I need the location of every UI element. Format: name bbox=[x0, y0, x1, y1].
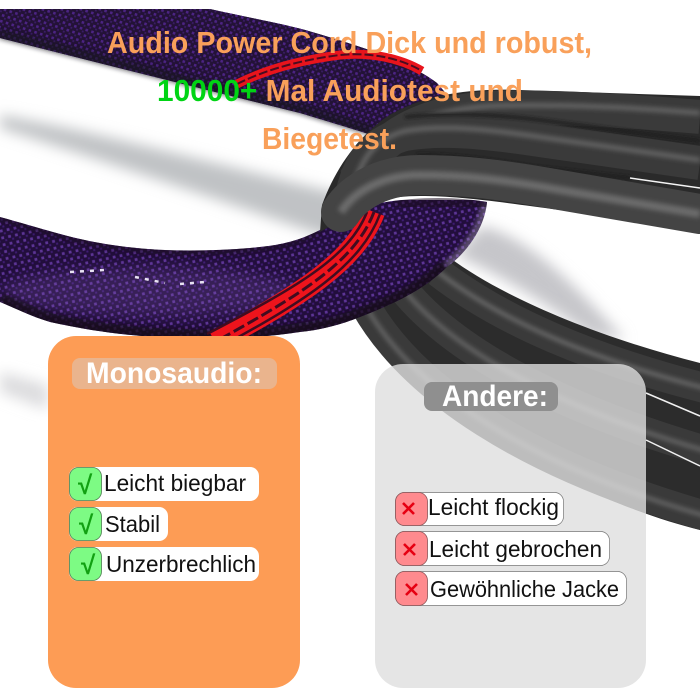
cable bundle backing bbox=[320, 90, 700, 232]
lower braided purple cable bbox=[0, 199, 500, 346]
red stripe on upper cable bbox=[237, 54, 422, 84]
title line two: 10000+ Mal Audiotest und bbox=[157, 73, 523, 108]
panel heading: Andere: Andere: bbox=[442, 380, 548, 413]
strand two bbox=[352, 128, 700, 195]
cast shadows bbox=[0, 115, 625, 410]
lower black cable strands bbox=[360, 258, 700, 530]
orange card bbox=[48, 336, 300, 688]
title line three: Biegetest. bbox=[262, 121, 397, 156]
item: Unzerbrechlich bbox=[69, 547, 259, 581]
item: Stabil: Stabil bbox=[105, 511, 160, 537]
item: Unzerbrechlich: √ bbox=[81, 550, 96, 580]
panel: Andere bbox=[375, 364, 646, 688]
title line one: Audio Power Cord Dick und robust, bbox=[107, 25, 592, 60]
title bbox=[107, 25, 592, 156]
item: Unzerbrechlich: Unzerbrechlich bbox=[106, 551, 256, 577]
item: Stabil: √ bbox=[79, 510, 94, 540]
item: Leicht flockig bbox=[396, 492, 564, 526]
red stripe on lower cable bbox=[207, 212, 380, 346]
item: Stabil bbox=[69, 507, 168, 541]
groove between strands two and three bbox=[417, 155, 630, 178]
item: Leicht gebrochen: Leicht gebrochen bbox=[429, 536, 602, 562]
strands backing bbox=[360, 258, 700, 530]
panel heading: Monosaudio: Monosaudio: bbox=[86, 357, 262, 390]
strand three bbox=[341, 175, 700, 214]
item: Gewöhnliche Jacke: Gewöhnliche Jacke bbox=[430, 576, 619, 602]
groove between strands one and two bbox=[405, 114, 700, 141]
strand one bbox=[355, 105, 700, 180]
item: Leicht flockig: Leicht flockig bbox=[428, 494, 559, 520]
item: Gewöhnliche Jacke bbox=[396, 572, 626, 606]
translucent grey card bbox=[375, 364, 646, 688]
sheen highlight specks bbox=[70, 270, 205, 284]
item: Leicht gebrochen bbox=[396, 532, 610, 566]
item: Leicht biegbar bbox=[69, 467, 259, 501]
item: Leicht biegbar: Leicht biegbar bbox=[104, 470, 246, 496]
panel: Monosaudio bbox=[48, 336, 300, 688]
item: Leicht biegbar: √ bbox=[78, 470, 93, 500]
upper black cable strands bbox=[320, 90, 700, 232]
upper braided purple cable bbox=[0, 9, 460, 135]
